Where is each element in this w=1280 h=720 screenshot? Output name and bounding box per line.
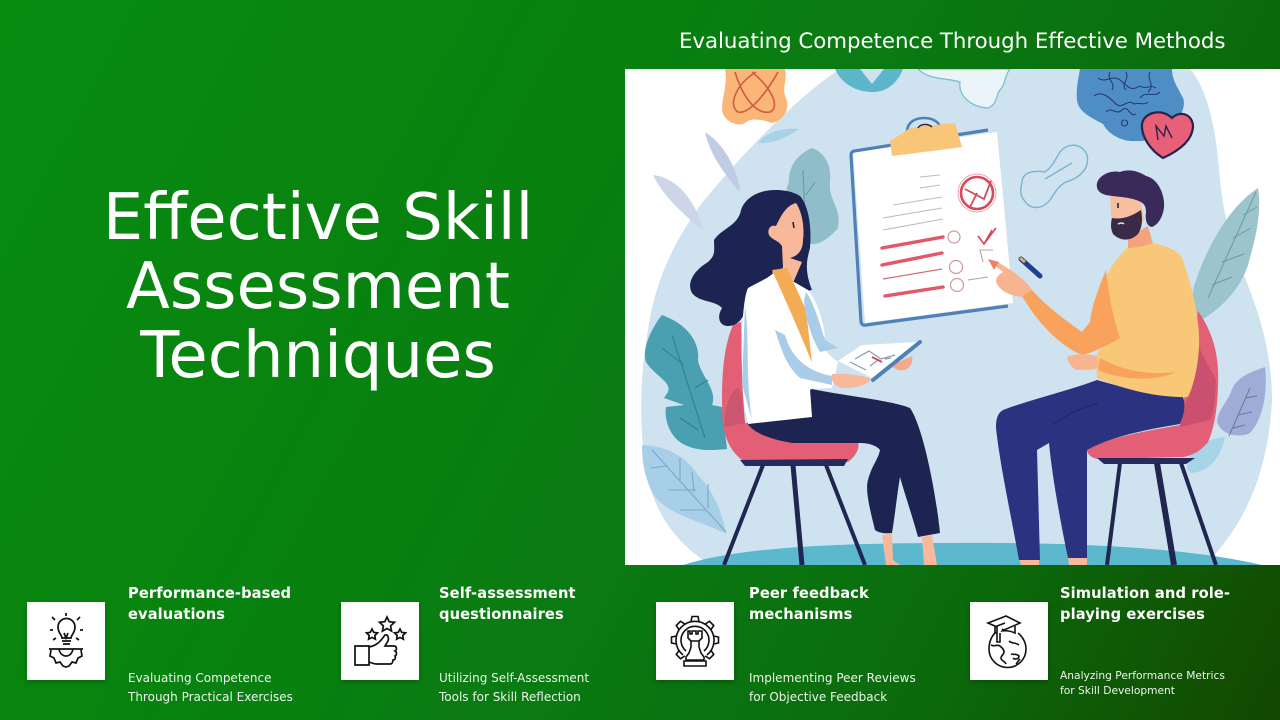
decoration: top orange atom blob	[722, 69, 787, 124]
tablet	[838, 342, 918, 378]
description: Through Practical Exercises	[128, 690, 293, 704]
title: Assessment	[126, 250, 510, 324]
subtitle: Evaluating Competence Through Effective Methods	[679, 29, 1225, 54]
description: Implementing Peer Reviews	[749, 671, 916, 685]
background blob	[641, 69, 1272, 565]
left hand	[831, 374, 871, 388]
sweater	[1092, 243, 1199, 397]
heading	[749, 585, 869, 623]
decoration: heart	[1142, 112, 1193, 158]
description: for Objective Feedback	[749, 690, 887, 704]
pen	[1020, 258, 1040, 276]
neck	[1128, 226, 1153, 250]
teal leaf left	[645, 315, 727, 450]
title: Effective Skill	[103, 181, 533, 255]
card 2: self-assessment questionnaires	[340, 585, 589, 704]
title	[103, 181, 533, 393]
heading: Performance-based	[128, 585, 291, 602]
neck and face	[768, 203, 804, 290]
leaf behind woman	[787, 148, 839, 244]
man's chair	[1087, 311, 1218, 565]
heading: mechanisms	[749, 606, 852, 623]
feather leaf right	[1192, 188, 1259, 322]
heading: playing exercises	[1060, 606, 1205, 623]
resting hand	[1067, 354, 1098, 370]
description	[438, 671, 589, 704]
pointing hand	[988, 260, 1032, 297]
leaves right of man's chair	[1187, 367, 1266, 473]
heading: Peer feedback	[749, 585, 869, 602]
woman's chair	[722, 322, 865, 565]
title: Techniques	[140, 319, 496, 393]
trousers	[996, 380, 1184, 560]
heading: Self-assessment	[439, 585, 576, 602]
man	[988, 170, 1199, 565]
icon: light bulb over gear	[26, 602, 104, 680]
heading: questionnaires	[439, 606, 564, 623]
clipboard	[851, 118, 1013, 325]
decoration: top teal shape	[835, 69, 903, 92]
description: Tools for Skill Reflection	[439, 690, 581, 704]
description: for Skill Development	[1060, 684, 1175, 696]
arm	[1022, 270, 1120, 355]
card 1: performance-based evaluations	[25, 585, 293, 704]
description	[1060, 668, 1225, 696]
right hand	[890, 356, 912, 370]
illustration: two people in a skill assessment conversation	[625, 69, 1280, 565]
icon: thumbs up with stars	[341, 602, 419, 680]
description: Analyzing Performance Metrics	[1060, 668, 1225, 682]
card 3: peer feedback mechanisms	[654, 585, 916, 704]
shirt	[772, 268, 812, 363]
pants	[747, 389, 940, 537]
lab coat	[742, 271, 838, 424]
beard	[1111, 210, 1142, 240]
teal floor	[683, 543, 1262, 565]
heading	[439, 585, 576, 623]
feather leaf bottom left	[642, 445, 726, 534]
decoration: small leaves	[653, 129, 799, 232]
heading: Simulation and role-	[1060, 585, 1230, 602]
decoration: outline bone	[1021, 145, 1088, 208]
heading	[128, 585, 291, 623]
icon: chess rook in gear	[656, 602, 734, 680]
heading: evaluations	[128, 606, 225, 623]
decoration: blue molecule cloud	[1077, 69, 1184, 141]
description	[128, 671, 293, 704]
face	[1110, 192, 1144, 240]
feet	[882, 533, 937, 565]
feet	[1019, 558, 1087, 565]
woman	[690, 190, 940, 565]
icon: graduation cap on globe	[970, 602, 1048, 680]
heading	[1060, 585, 1230, 623]
lapels	[742, 292, 838, 420]
hair	[690, 190, 812, 326]
description: Utilizing Self-Assessment	[439, 671, 589, 685]
card 4: simulation and role-playing exercises	[968, 585, 1230, 696]
description: Evaluating Competence	[128, 671, 272, 685]
hair	[1097, 170, 1164, 227]
decoration: outline cloud	[918, 69, 1010, 108]
description	[749, 671, 916, 704]
